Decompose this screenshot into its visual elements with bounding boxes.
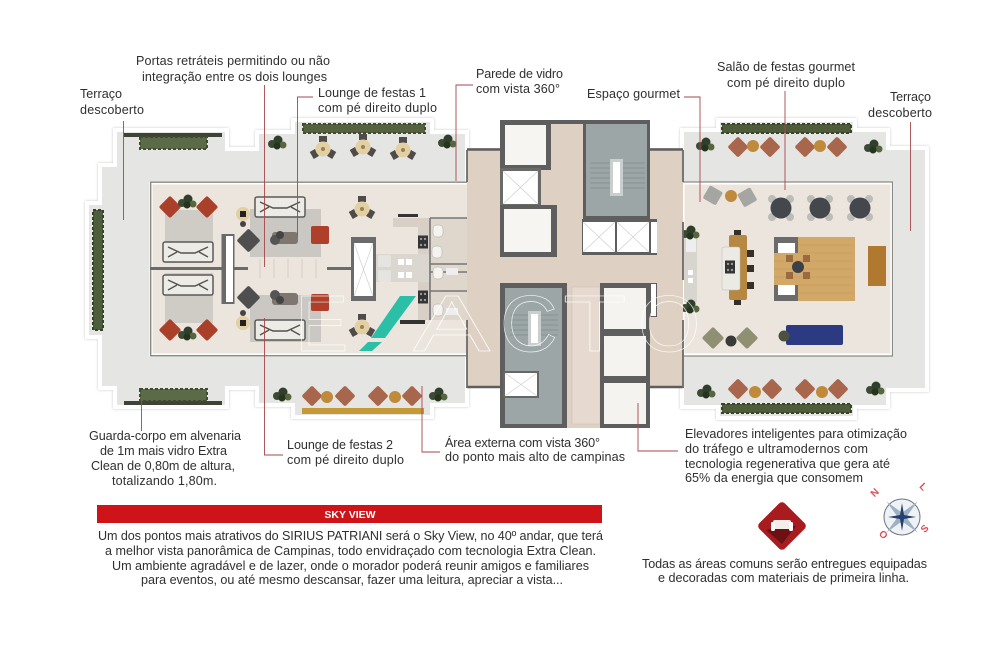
upper stairs bbox=[583, 120, 650, 220]
right terrace bbox=[682, 120, 927, 418]
label: parede de vidro: Parede de vidro bbox=[476, 67, 563, 81]
sky view text: Um dos pontos mais atrativos do SIRIUS PATRIANI será o Sky View, no 40º andar, que terá bbox=[98, 529, 603, 543]
label: parede de vidro bbox=[476, 67, 563, 96]
dividing wall bbox=[150, 259, 430, 278]
watermark EXACTO: T bbox=[563, 279, 627, 368]
left lounge room bbox=[150, 182, 469, 356]
floor plan bbox=[87, 120, 927, 428]
label: guarda-corpo: totalizando 1,80m. bbox=[112, 474, 217, 488]
label: elevadores: Elevadores inteligentes para otimização bbox=[685, 427, 907, 441]
blue sofa bbox=[778, 325, 843, 345]
label: portas retrateis: integração entre os dois lounges bbox=[142, 70, 327, 84]
dark round tables bbox=[768, 195, 873, 221]
label: guarda-corpo: Guarda-corpo em alvenaria bbox=[89, 429, 241, 443]
label: terraco esquerdo: Terraço bbox=[80, 87, 122, 101]
left terrace bbox=[87, 120, 467, 417]
icon: sofa diamond bbox=[757, 501, 807, 551]
label: elevadores bbox=[685, 427, 907, 485]
grey lounge chairs bbox=[703, 185, 757, 208]
leader lines bbox=[124, 85, 910, 455]
central core bbox=[467, 120, 683, 428]
sky view text: Um ambiente agradável e de lazer, onde o morador poderá reunir amigos e familiares bbox=[112, 559, 589, 573]
label: lounge 1: com pé direito duplo bbox=[318, 101, 437, 115]
label: terraco esquerdo: descoberto bbox=[80, 103, 144, 117]
label: lounge 2: Lounge de festas 2 bbox=[287, 438, 393, 452]
label: espaco gourmet: Espaço gourmet bbox=[587, 87, 680, 101]
label: guarda-corpo: Clean de 0,80m de altura, bbox=[91, 459, 235, 473]
terrace furniture right bbox=[696, 136, 884, 400]
wood floor lounge bbox=[774, 237, 855, 301]
sky view text bbox=[98, 529, 603, 587]
sky view text: a melhor vista panorâmica de Campinas, todo envidraçado com tecnologia Extra Clean. bbox=[105, 544, 596, 558]
watermark green slash bbox=[359, 296, 416, 351]
terrace planters right bbox=[722, 124, 851, 413]
label: terraco direito: Terraço bbox=[890, 90, 931, 104]
watermark EXACTO: A bbox=[413, 280, 491, 369]
label: lounge 2: com pé direito duplo bbox=[287, 453, 404, 467]
label: lounge 1 bbox=[318, 86, 437, 115]
label: lounge 2 bbox=[287, 438, 404, 467]
note: areas comuns bbox=[642, 557, 927, 585]
fireplace panel bbox=[222, 234, 234, 304]
lower stairs bbox=[500, 283, 567, 428]
rugs bbox=[165, 209, 321, 342]
kitchen island bbox=[722, 230, 754, 305]
olive chairs bbox=[702, 327, 758, 349]
sky view heading bbox=[97, 505, 602, 523]
label: salao de festas: com pé direito duplo bbox=[727, 76, 845, 90]
sky view text: para eventos, ou até mesmo descansar, fazer uma leitura, apreciar a vista... bbox=[141, 573, 563, 587]
right salon room bbox=[681, 182, 892, 356]
label: area externa: Área externa com vista 360° bbox=[445, 435, 600, 450]
terrace planters left bbox=[93, 124, 425, 414]
watermark EXACTO: C bbox=[500, 279, 558, 368]
label: portas retrateis: Portas retráteis permitindo ou não bbox=[136, 54, 330, 68]
label: guarda-corpo: de 1m mais vidro Extra bbox=[100, 444, 227, 458]
label: area externa: do ponto mais alto de campinas bbox=[445, 450, 625, 464]
note: areas comuns: Todas as áreas comuns serão entregues equipadas bbox=[642, 557, 927, 571]
watermark EXACTO: E bbox=[295, 279, 348, 368]
note: areas comuns: e decoradas com materiais de primeira linha. bbox=[658, 571, 909, 585]
wood bench bbox=[868, 246, 886, 286]
label: terraco direito bbox=[868, 90, 932, 120]
central shafts bbox=[582, 219, 657, 255]
icon: compass rose: S bbox=[919, 523, 932, 535]
icon: compass rose: N bbox=[869, 487, 882, 500]
central shaft bbox=[351, 237, 376, 301]
watermark EXACTO bbox=[295, 279, 700, 369]
label: elevadores: tecnologia regenerativa que gera até bbox=[685, 457, 890, 471]
lower elevators bbox=[600, 283, 657, 428]
label: parede de vidro: com vista 360° bbox=[476, 82, 560, 96]
icon: compass rose: O bbox=[876, 529, 890, 542]
label: elevadores: do tráfego e ultramodernos com bbox=[685, 442, 868, 456]
label: salao de festas: Salão de festas gourmet bbox=[717, 60, 856, 74]
label: portas retrateis bbox=[136, 54, 330, 84]
sky view heading: SKY VIEW bbox=[324, 509, 376, 521]
kitchens and bathrooms bbox=[376, 214, 467, 324]
label: elevadores: 65% da energia que consomem bbox=[685, 471, 863, 485]
label: terraco direito: descoberto bbox=[868, 106, 932, 120]
label: terraco esquerdo bbox=[80, 87, 144, 117]
red armchairs bbox=[159, 194, 329, 341]
label: area externa bbox=[445, 435, 625, 464]
label: lounge 1: Lounge de festas 1 bbox=[318, 86, 426, 100]
upper elevators bbox=[500, 120, 650, 257]
lobby inlay bbox=[572, 287, 600, 424]
side tables and grey armchairs bbox=[236, 207, 298, 330]
sofas bbox=[163, 197, 305, 340]
label: salao de festas bbox=[717, 60, 856, 90]
service counter bbox=[681, 226, 700, 314]
watermark EXACTO: O bbox=[638, 279, 700, 368]
label: guarda-corpo bbox=[89, 429, 241, 488]
icon: compass rose: L bbox=[917, 481, 929, 493]
tables bbox=[349, 196, 375, 337]
icon: compass rose bbox=[869, 481, 933, 548]
terrace furniture left bbox=[268, 134, 456, 407]
